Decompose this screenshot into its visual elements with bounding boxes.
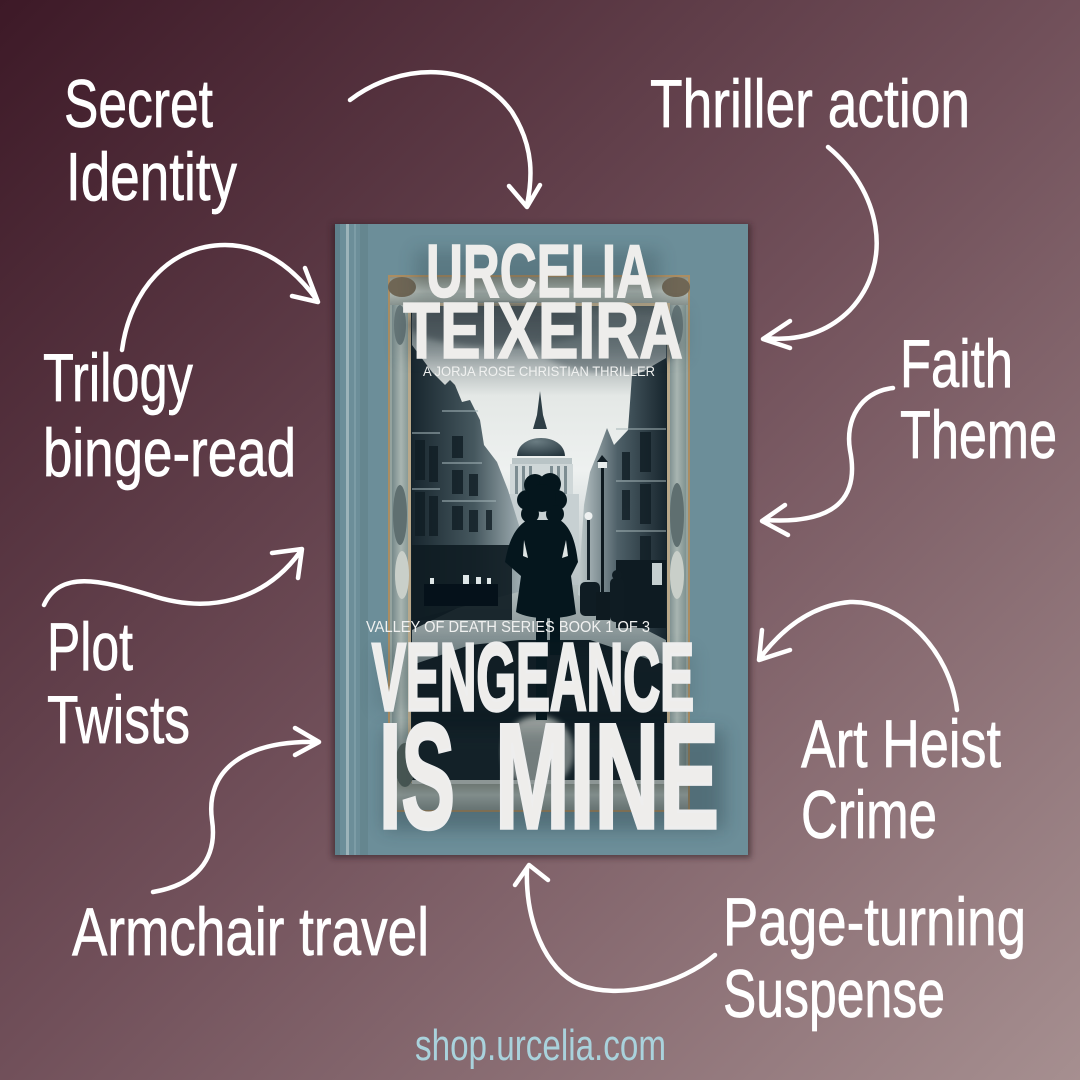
label: Trilogy binge-read — [43, 340, 296, 491]
arrow: Faith Theme to book — [762, 388, 893, 535]
label: Trilogy binge-read: Trilogy — [43, 340, 193, 416]
author name — [403, 229, 683, 375]
storm clouds — [410, 303, 590, 347]
crowd silhouettes — [580, 570, 624, 622]
ornate frame — [388, 275, 690, 812]
label: Faith Theme: Faith — [900, 326, 1013, 402]
arrow: Thriller action to book — [763, 147, 877, 348]
book spine folds — [335, 224, 368, 855]
book title: MINE — [495, 692, 719, 860]
label: Secret Identity — [64, 66, 237, 215]
label: Plot Twists: Plot — [47, 609, 133, 685]
arrow: Page-turning Suspense to book — [515, 865, 715, 991]
street lamps — [584, 455, 610, 620]
author name: URCELIA — [426, 229, 653, 313]
label: Secret Identity: Identity — [66, 139, 237, 215]
woman silhouette — [505, 473, 578, 720]
label: Secret Identity: Secret — [64, 66, 213, 142]
arrow: Secret Identity to book — [350, 72, 540, 207]
cathedral dome — [505, 391, 579, 554]
label: Page-turning Suspense — [723, 884, 1026, 1032]
arrow: Trilogy binge-read to book — [122, 245, 318, 350]
frame corner ornaments — [388, 277, 690, 787]
left buildings — [412, 345, 526, 620]
label: Plot Twists: Twists — [47, 682, 190, 758]
road — [412, 585, 666, 780]
book body — [335, 224, 748, 855]
sky — [412, 306, 666, 606]
label: Plot Twists — [47, 609, 190, 758]
arrow: Plot Twists to book — [44, 549, 302, 605]
arrow: Armchair travel to book — [153, 728, 319, 892]
book title: VENGEANCE — [372, 624, 694, 731]
label: Thriller action: Thriller action — [650, 66, 970, 142]
city street painting — [410, 303, 680, 788]
right buildings — [578, 358, 666, 640]
book cover — [332, 224, 751, 860]
label: Page-turning Suspense: Suspense — [723, 956, 945, 1032]
label: Art Heist Crime: Art Heist — [801, 706, 1001, 782]
label: Art Heist Crime: Crime — [801, 777, 937, 853]
website link: shop.urcelia.com — [415, 1021, 666, 1070]
book shadow — [332, 224, 751, 858]
author name: TEIXEIRA — [403, 286, 683, 375]
series tagline: A JORJA ROSE CHRISTIAN THRILLER — [423, 363, 655, 379]
arrow: Art Heist Crime to book — [759, 602, 957, 710]
lower foreground — [412, 640, 666, 788]
label: Art Heist Crime — [801, 706, 1001, 853]
book title — [372, 624, 719, 860]
book title: IS — [379, 692, 455, 860]
label: Trilogy binge-read: binge-read — [43, 415, 296, 491]
series label: VALLEY OF DEATH SERIES BOOK 1 OF 3 — [366, 619, 650, 636]
label: Armchair travel: Armchair travel — [72, 894, 429, 970]
label: Faith Theme — [900, 326, 1057, 473]
title shadows — [376, 250, 724, 830]
